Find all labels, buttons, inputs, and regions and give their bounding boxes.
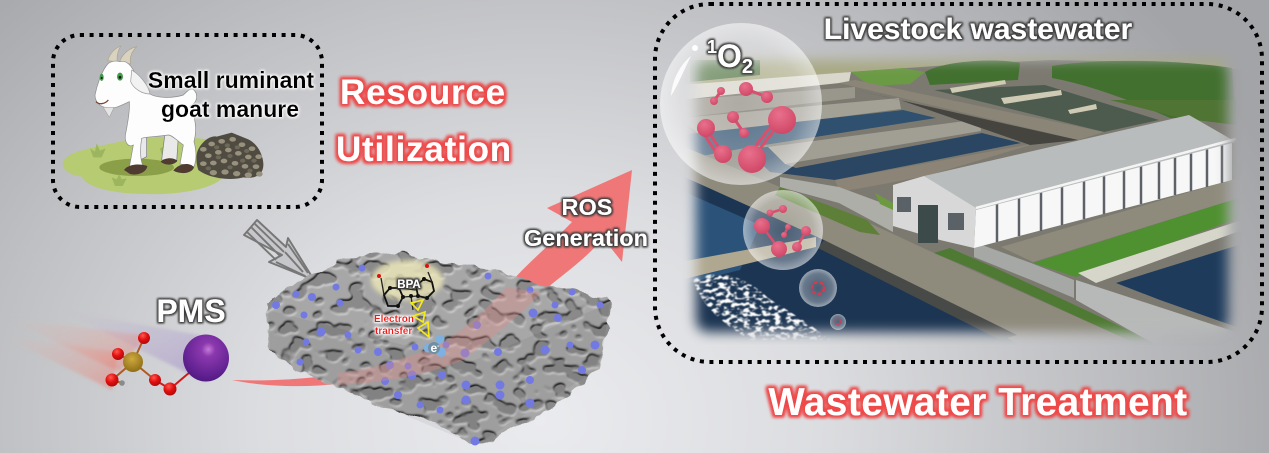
shaded front faces: [268, 303, 610, 445]
bubble: small singlet oxygen: [799, 269, 837, 307]
tree lines: [925, 60, 1236, 118]
main road: [688, 150, 1109, 340]
arrow: translucent overlay on catalyst: [337, 287, 541, 385]
lower right water: [1116, 246, 1236, 326]
building wall stripes: [997, 143, 1222, 242]
molecule: BPA: [377, 264, 434, 310]
panel: livestock wastewater: [655, 4, 1262, 362]
heading: resource utilization: Utilization: [336, 130, 512, 169]
arrow: red curved reaction arrow behind catalyst: [232, 170, 632, 386]
bubble: tiny singlet oxygen: [830, 314, 846, 330]
grass tufts: [90, 143, 168, 186]
potassium sphere: [183, 334, 229, 382]
icon: electron: [424, 334, 446, 357]
label: ROS generation: ROS: [562, 194, 612, 220]
label: small ruminant goat manure: [148, 67, 314, 122]
oxygen molecules: [697, 82, 796, 173]
heading: resource utilization: Resource: [340, 73, 506, 112]
label: ROS generation: Generation: [524, 225, 648, 251]
label: singlet oxygen: 2: [742, 56, 753, 78]
label: singlet oxygen: O: [717, 38, 742, 74]
lower left water: [688, 179, 1010, 340]
goat mouth: [96, 100, 108, 104]
field and horizon: [692, 54, 1232, 84]
nitrogen dopant dots: [272, 264, 604, 446]
tanks and water: [680, 72, 851, 100]
grass patch: [63, 137, 222, 194]
building gable: [893, 176, 976, 248]
heading: wastewater treatment: Wastewater Treatment: [768, 381, 1188, 424]
goat horns: [108, 46, 137, 64]
label: singlet oxygen: 1: [707, 37, 717, 57]
grass bed: [1033, 196, 1245, 277]
motion trails: [0, 310, 206, 390]
atoms: [123, 352, 143, 372]
building side wall: [974, 140, 1232, 248]
dashed frame: goat panel: [53, 35, 322, 207]
fence behind building: [780, 177, 893, 232]
illustration: goat on grass with manure pellets: [63, 46, 263, 194]
label: small ruminant goat manure: Small ruminant: [148, 67, 314, 93]
grass area right: [1110, 100, 1236, 125]
panel: goat manure feedstock: [53, 35, 322, 207]
arrow: striped grey arrow to catalyst: [244, 220, 314, 280]
label: electron transfer: [374, 314, 414, 337]
adsorbed BPA zone: [371, 260, 443, 300]
building roof: [924, 115, 1236, 210]
label: livestock wastewater: Livestock wastewater: [824, 13, 1133, 46]
bubble highlights: [671, 56, 691, 96]
grass shadow: [99, 159, 174, 176]
icon: yellow electron transfer arrows: [411, 300, 429, 337]
upper causeway: [839, 80, 1104, 140]
goat body and head: [95, 61, 197, 167]
dam walkway: [680, 237, 816, 280]
label: electron transfer: Electron: [374, 314, 414, 325]
bubble: large singlet oxygen: [660, 23, 822, 185]
label: PMS: PMS: [156, 293, 226, 329]
photo: wastewater treatment plant: [680, 45, 1245, 350]
pavement: [1002, 181, 1228, 262]
goat eyes: [100, 73, 123, 81]
green strip: [934, 248, 1144, 338]
heading: resource utilization: [336, 73, 512, 169]
label: electron transfer: transfer: [375, 326, 412, 337]
bubble: medium singlet oxygen: [743, 190, 823, 270]
icon: electron: e: [430, 341, 437, 355]
icon: electron: -: [437, 343, 440, 350]
goat beard: [103, 107, 114, 117]
white embankment: [1078, 219, 1245, 283]
goat hind legs: [133, 133, 178, 163]
photo base: [689, 60, 1234, 336]
goat ear: [131, 70, 150, 94]
manure pellets: [196, 133, 263, 179]
upper pond: [934, 85, 1159, 132]
label: ROS generation: [524, 194, 648, 251]
lower fence: [974, 242, 1074, 298]
goat hooves: [124, 158, 194, 175]
label: BPA: BPA: [397, 279, 421, 291]
label: small ruminant goat manure: goat manure: [161, 96, 299, 122]
dashed frame: wastewater panel: [655, 4, 1262, 362]
water foam: [693, 274, 830, 340]
porous block body: [265, 252, 610, 447]
molecule: PMS with motion trails: [0, 310, 229, 396]
bonds: [112, 338, 155, 383]
catalyst: porous carbon block: [265, 252, 610, 447]
